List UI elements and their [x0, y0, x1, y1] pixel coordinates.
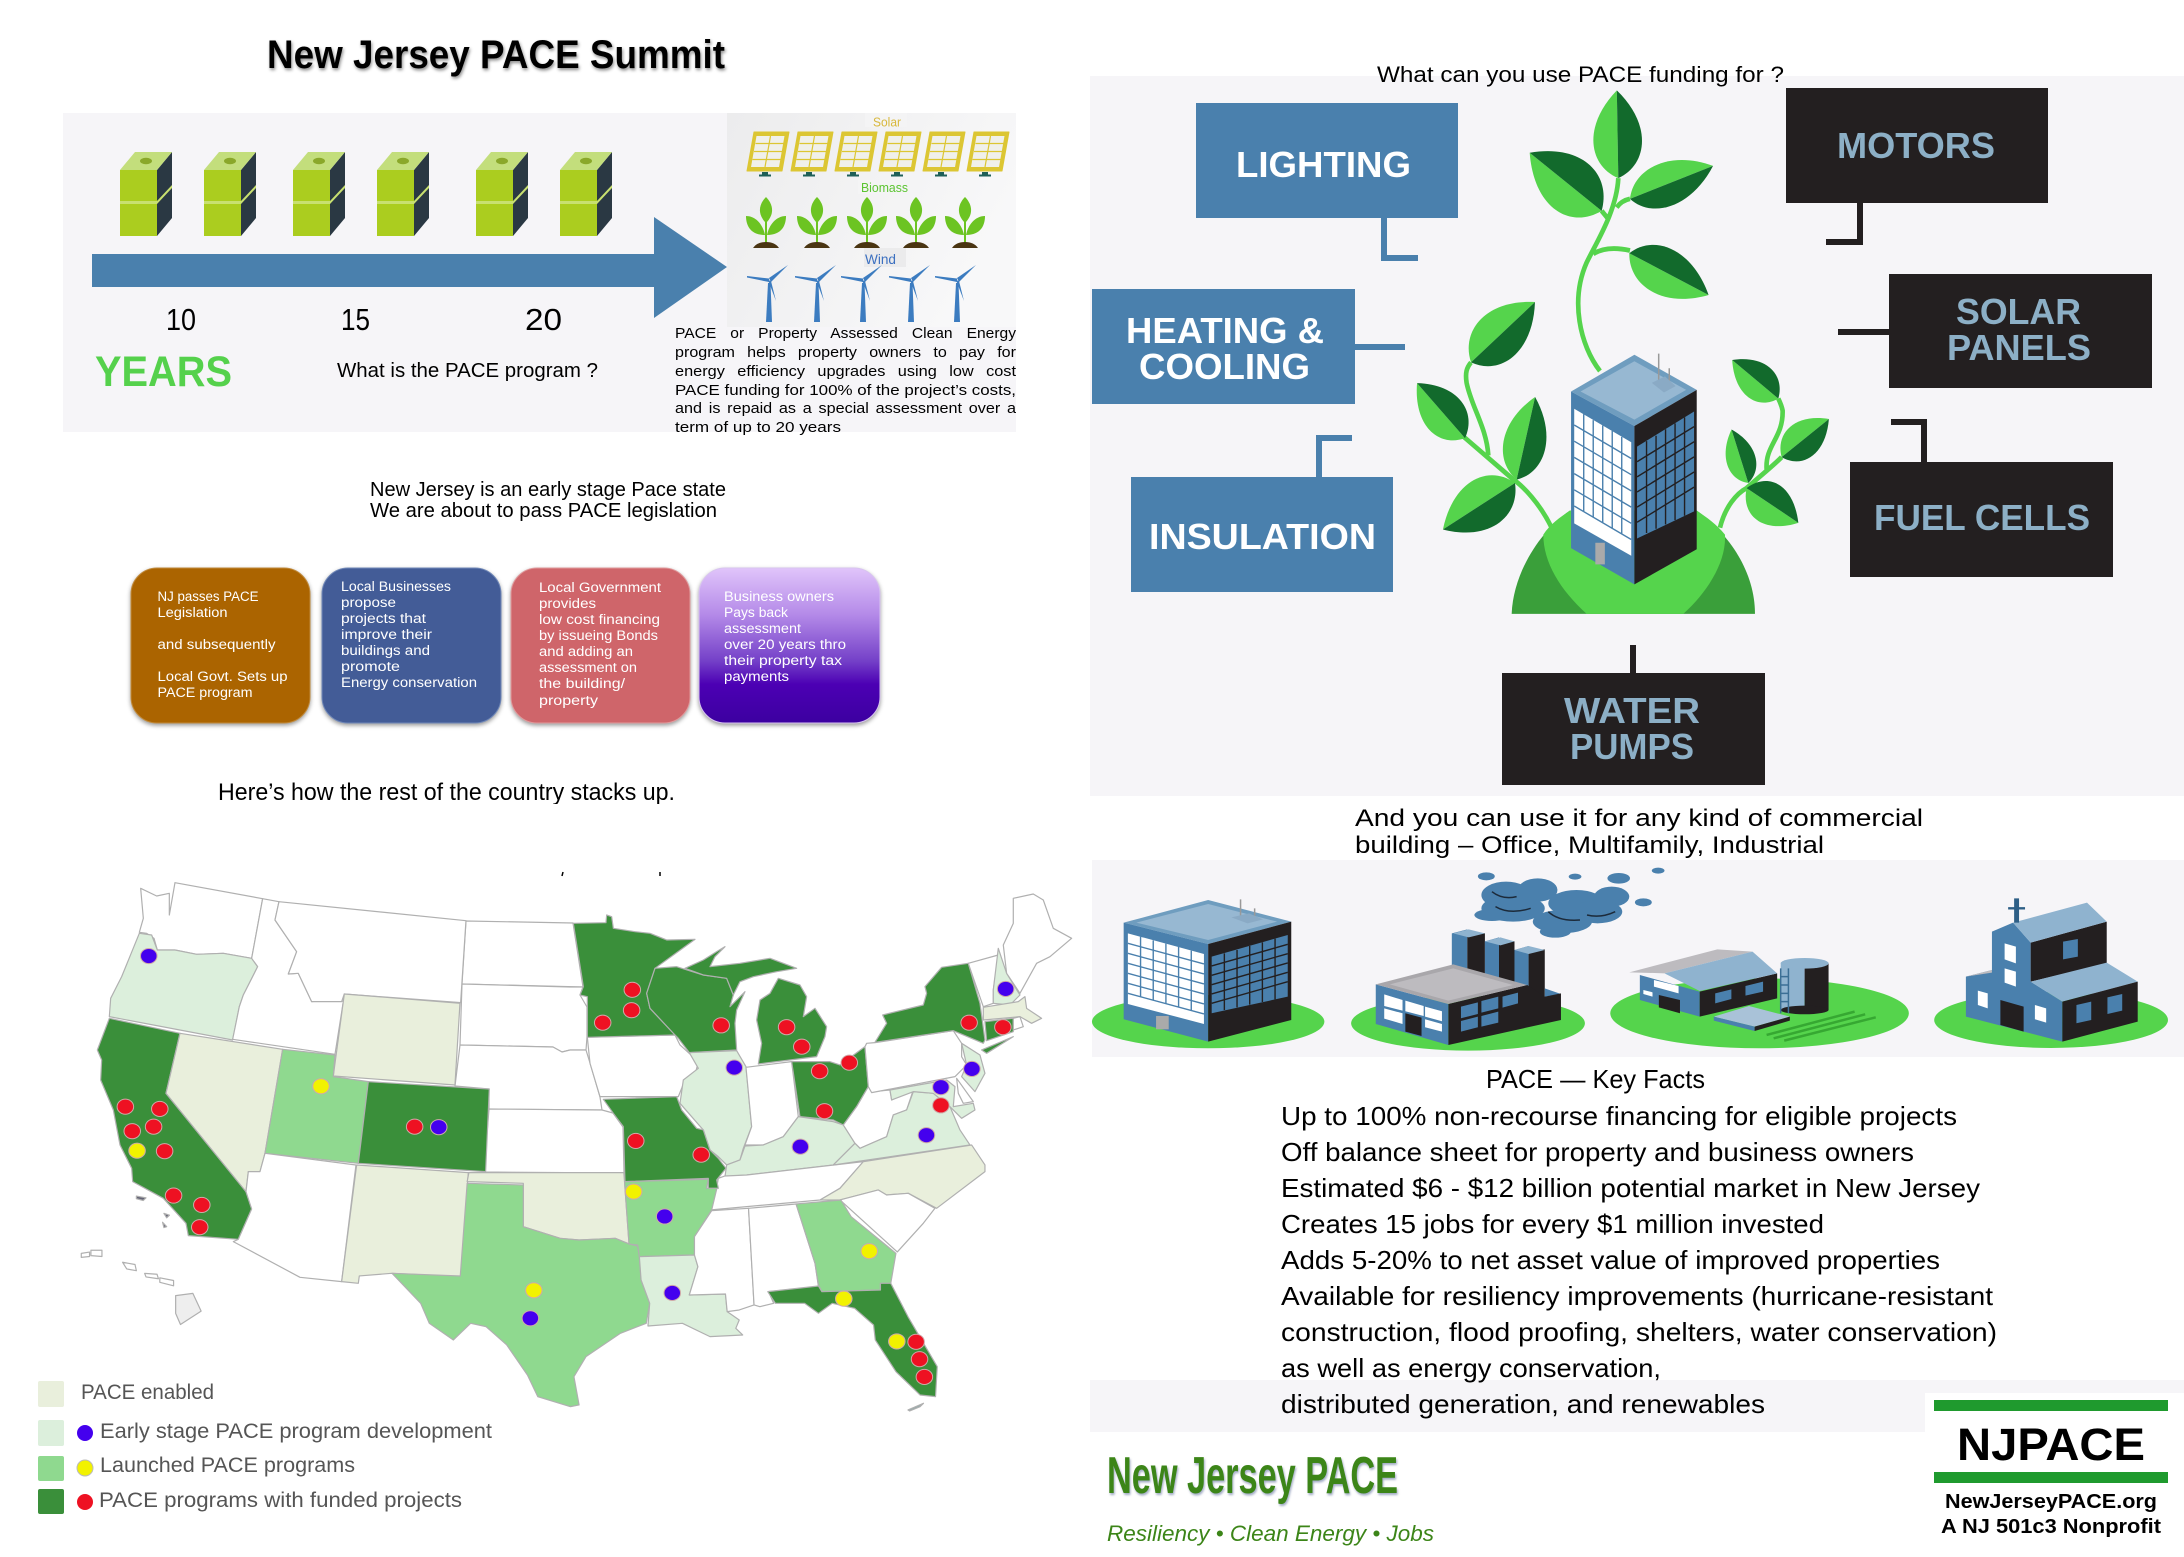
intro text: early stage state [370, 479, 726, 522]
step 2 [322, 568, 501, 723]
text block: key facts: Estimated $6 - $12 billion potential market in New Jersey [1281, 1173, 1980, 1203]
step 3: provides [539, 596, 596, 611]
step 4: Business owners [724, 589, 834, 604]
box: fuel cells: FUEL CELLS [1874, 497, 2090, 538]
intro text: early stage state: We are about to pass PACE legislation [370, 500, 717, 522]
southern states [392, 1173, 937, 1411]
text block: PACE definition: PACE funding for 100% of the project’s costs, [675, 383, 1016, 399]
box: heating and cooling: COOLING [1139, 346, 1310, 387]
icon: smoke clouds [1474, 868, 1664, 938]
process steps [131, 568, 880, 723]
panel: uses of PACE funding [1090, 62, 2184, 796]
step 1: and subsequently [158, 637, 276, 652]
step 1: Legislation [158, 605, 228, 620]
text block: PACE definition: and is repaid as a special assessment over a [675, 401, 1017, 417]
map heading: Here’s how the rest of the country stacks up. [218, 779, 675, 806]
step 1: NJ passes PACE [158, 589, 258, 604]
text block: PACE definition: PACE or Property Assessed Clean Energy [675, 326, 1017, 342]
logo: NJPACE: A NJ 501c3 Nonprofit [1941, 1516, 2161, 1538]
text block: key facts: Available for resiliency improvements (hurricane-resistant [1281, 1281, 1994, 1311]
heading: uses: What can you use PACE funding for ? [1377, 62, 1784, 87]
box: solar panels [1838, 274, 2152, 388]
solar label: Solar [873, 114, 902, 130]
map heading [210, 779, 690, 876]
step 3: the building/ [539, 676, 625, 691]
panel: what is PACE [63, 113, 1016, 432]
step 4: over 20 years thro [724, 637, 846, 652]
western states [97, 883, 489, 1283]
step 3: property [539, 693, 598, 708]
text block: key facts: construction, flood proofing, shelters, water conservation) [1281, 1317, 1997, 1347]
step 1: Local Govt. Sets up [158, 669, 288, 684]
box: water pumps: PUMPS [1570, 726, 1694, 767]
text block: key facts: Adds 5-20% to net asset value of improved properties [1281, 1245, 1940, 1275]
step 2: improve their [341, 627, 433, 642]
box: heating and cooling [1092, 289, 1405, 404]
timeline numbers: 20 [525, 302, 562, 337]
question: What is the PACE program ? [337, 360, 598, 382]
box: heating and cooling: HEATING & [1126, 310, 1324, 351]
text block: PACE definition: energy efficiency upgrades using low cost [675, 364, 1016, 380]
text block: PACE definition: term of up to 20 years [675, 420, 841, 436]
intro text: early stage state: New Jersey is an early stage Pace state [370, 479, 726, 501]
step 3 [511, 568, 690, 723]
text: building types: building – Office, Multifamily, Industrial [1355, 832, 1824, 859]
step 4: Pays back [724, 605, 788, 620]
timeline numbers: 10 [166, 302, 196, 337]
text block: key facts: Creates 15 jobs for every $1 million invested [1281, 1209, 1824, 1239]
text block: key facts: PACE — Key Facts [1486, 1064, 1705, 1094]
step 2: Local Businesses [341, 579, 451, 594]
step 4: assessment [724, 621, 801, 636]
text block: key facts: Off balance sheet for property and business owners [1281, 1137, 1914, 1167]
footer brand: New Jersey PACE: New Jersey PACE [1107, 1447, 1398, 1505]
timeline numbers: 15 [341, 302, 370, 337]
icon: plants [746, 197, 985, 248]
text: building types: And you can use it for any kind of commercial [1355, 805, 1923, 832]
box: motors: MOTORS [1837, 125, 1995, 166]
title: New Jersey PACE Summit [267, 33, 725, 77]
legend: PACE programs with funded projects [99, 1489, 462, 1512]
box: lighting [1196, 103, 1458, 258]
step 3: and adding an [539, 644, 633, 659]
program dots [117, 948, 1014, 1385]
timeline numbers [166, 302, 562, 337]
step 3: by issueing Bonds [539, 628, 658, 643]
box: water pumps: WATER [1564, 690, 1700, 731]
step 2: propose [341, 595, 396, 610]
wind label: Wind [865, 251, 896, 267]
legend: PACE enabled [81, 1381, 214, 1404]
logo: NJPACE [1925, 1393, 2184, 1557]
step 4 [699, 568, 880, 723]
arrow: timeline [92, 217, 727, 318]
step 2: projects that [341, 611, 426, 626]
box: insulation: INSULATION [1149, 516, 1376, 557]
box: solar panels: PANELS [1947, 327, 2091, 368]
icon: factory [1351, 929, 1585, 1051]
band behind footer [1090, 1380, 2184, 1432]
box: motors [1786, 88, 2048, 242]
panel: building types [1092, 860, 2184, 1057]
box: solar panels: SOLAR [1956, 291, 2081, 332]
legend [38, 1381, 492, 1514]
text block: key facts: distributed generation, and renewables [1281, 1389, 1765, 1419]
step 3: Local Government [539, 580, 661, 595]
panel: renewable energy picture [727, 113, 1016, 327]
north-eastern and midwest states [573, 894, 1072, 1252]
icon: office building [1092, 899, 1324, 1048]
step 3: low cost financing [539, 612, 660, 627]
footer brand: New Jersey PACE: Resiliency • Clean Energy • Jobs [1107, 1521, 1434, 1546]
step 2: promote [341, 659, 400, 674]
step 1 [131, 568, 310, 723]
logo: NJPACE: NewJerseyPACE.org [1945, 1491, 2157, 1513]
logo: NJPACE: NJPACE [1957, 1419, 2145, 1470]
icon: battery cells [120, 152, 612, 236]
text block: key facts [1281, 1064, 1997, 1419]
box: fuel cells [1850, 422, 2113, 577]
illustration: building with vines [1401, 90, 1840, 614]
box: insulation [1131, 438, 1393, 592]
text block: key facts: as well as energy conservation, [1281, 1353, 1661, 1383]
box: water pumps [1502, 645, 1765, 785]
years label: YEARS [95, 348, 232, 396]
legend: Early stage PACE program development [100, 1420, 492, 1443]
icon: church [1934, 898, 2168, 1048]
icon: wind turbines [747, 265, 976, 322]
step 2: Energy conservation [341, 675, 477, 690]
footer brand: New Jersey PACE [1107, 1447, 1434, 1546]
text: building types [1355, 805, 1923, 859]
step 4: payments [724, 669, 789, 684]
central plains states [455, 921, 624, 1173]
text block: key facts: Up to 100% non-recourse financing for eligible projects [1281, 1101, 1957, 1131]
text block: PACE definition: program helps property owners to pay for [675, 345, 1016, 361]
step 4: their property tax [724, 653, 842, 668]
step 1: PACE program [158, 685, 252, 700]
icon: solar panels [747, 132, 1009, 176]
text block: PACE definition [675, 326, 1017, 436]
map: US PACE status [81, 883, 1072, 1411]
biomass label: Biomass [861, 180, 908, 195]
icon: farm [1610, 949, 1909, 1048]
legend: Launched PACE programs [100, 1454, 355, 1477]
Hawaii and California islands [81, 1196, 201, 1325]
step 3: assessment on [539, 660, 637, 675]
step 2: buildings and [341, 643, 430, 658]
box: lighting: LIGHTING [1236, 144, 1411, 185]
